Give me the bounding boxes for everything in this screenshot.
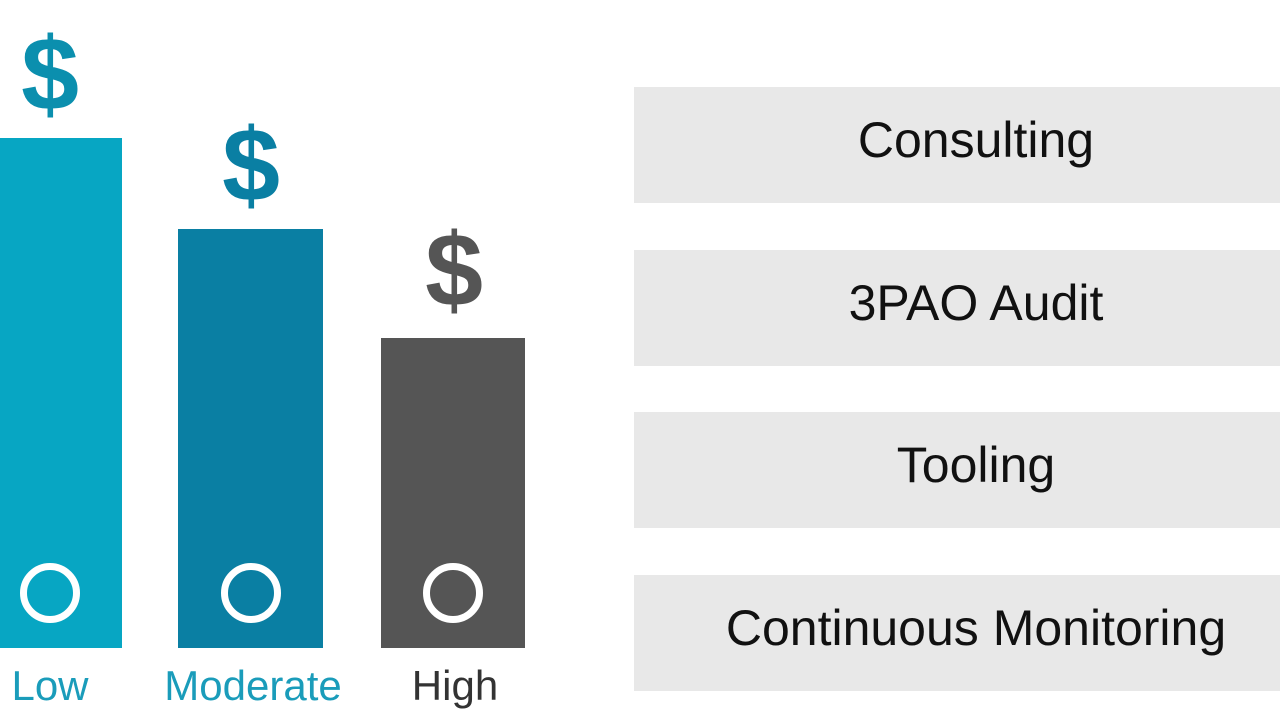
box: Consulting: Consulting bbox=[858, 112, 1094, 168]
box: Continuous Monitoring bbox=[634, 575, 1280, 691]
bar: moderate bbox=[178, 229, 323, 648]
box: Tooling bbox=[634, 412, 1280, 528]
icon: dollar low: $ bbox=[21, 17, 79, 133]
bar: high bbox=[381, 338, 525, 648]
label: Moderate: Moderate bbox=[164, 662, 342, 709]
box: Consulting bbox=[634, 87, 1280, 203]
box: Tooling: Tooling bbox=[897, 437, 1055, 493]
box: Continuous Monitoring: Continuous Monitoring bbox=[726, 600, 1226, 656]
bar chart bbox=[0, 17, 525, 648]
label: Low: Low bbox=[11, 662, 89, 709]
icon: dollar moderate: $ bbox=[222, 108, 280, 224]
box: 3PAO Audit bbox=[634, 250, 1280, 366]
icon: dollar high: $ bbox=[425, 213, 483, 329]
box: 3PAO Audit: 3PAO Audit bbox=[849, 275, 1103, 331]
bar: low bbox=[0, 138, 122, 648]
label: High: High bbox=[412, 662, 498, 709]
